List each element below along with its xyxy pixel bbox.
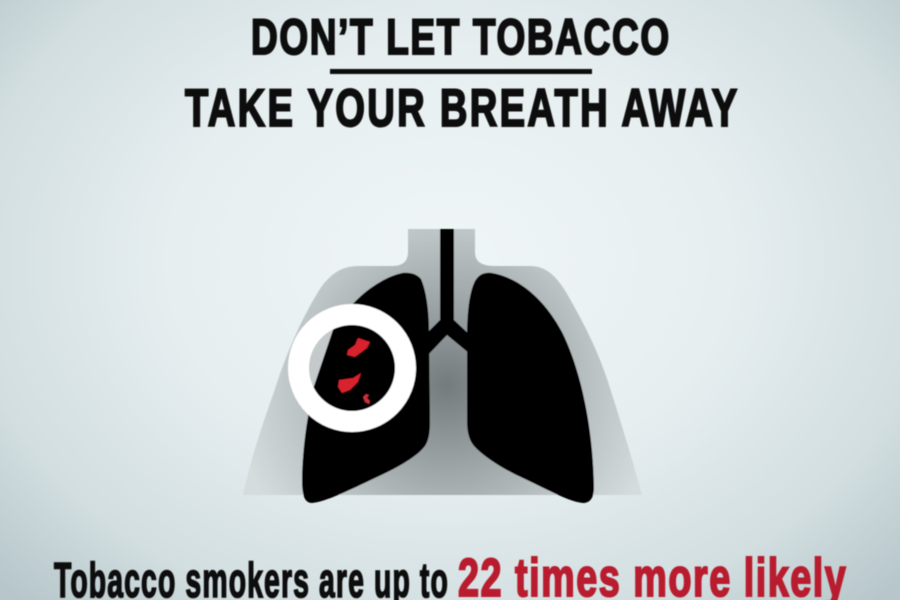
trachea and bronchi: [428, 229, 470, 355]
magnifier lens interior: [308, 324, 396, 412]
title line 1: DON’T LET TOBACCO: [251, 10, 669, 65]
bottom statement: [54, 547, 846, 600]
right lung: [467, 273, 594, 503]
title: [185, 10, 737, 137]
tumour: middle: [338, 373, 361, 393]
magnifier ring: [298, 314, 406, 422]
lens background outside lung: [308, 329, 334, 388]
grey shadow behind lungs: [243, 229, 642, 495]
left lung: [302, 273, 430, 503]
title line 2: TAKE YOUR BREATH AWAY: [185, 78, 737, 137]
title divider: [330, 69, 592, 74]
tumour: small: [363, 394, 370, 404]
lungs illustration: [243, 229, 642, 503]
tumour: upper: [347, 338, 370, 357]
